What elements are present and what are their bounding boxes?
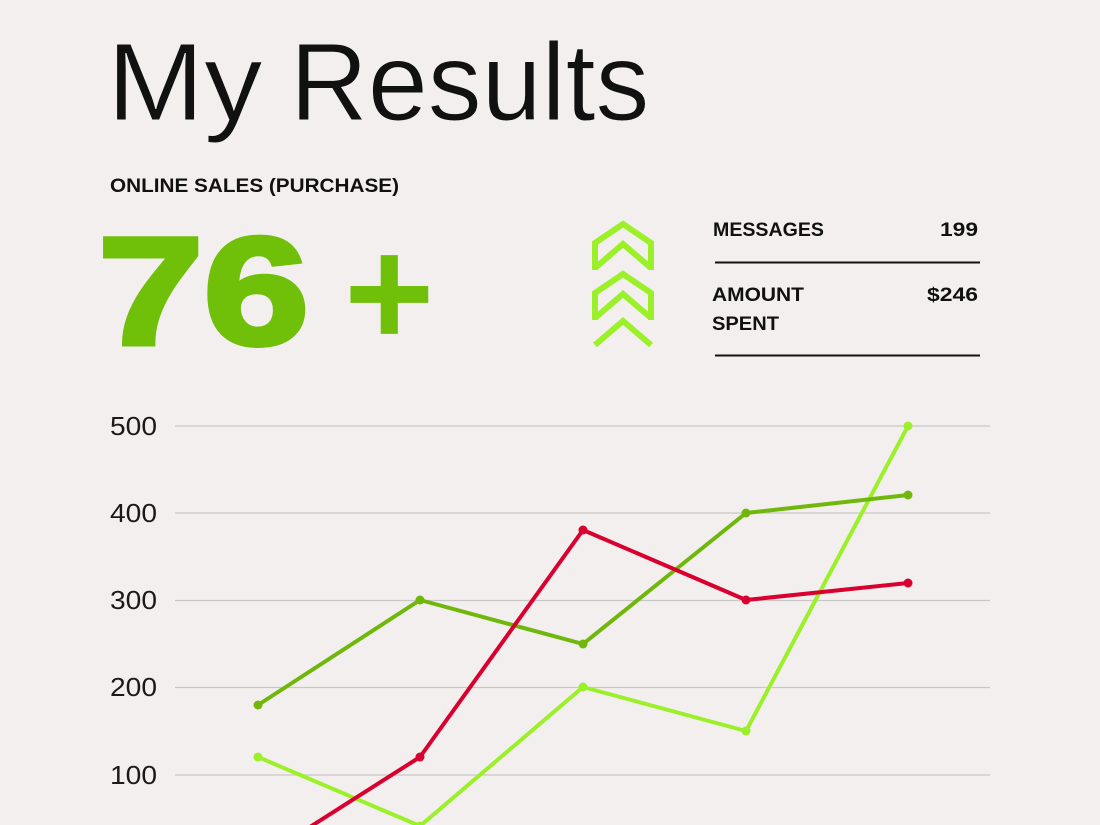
big number: 76: 76 [98, 206, 309, 377]
plus sign: + [344, 206, 435, 379]
y-axis labels: 400 [110, 498, 157, 528]
title: My [107, 21, 263, 144]
y-axis labels: 500 [110, 411, 157, 441]
title [107, 21, 649, 144]
line chart [110, 411, 990, 825]
stat: messages: MESSAGES [713, 219, 824, 241]
y-axis labels: 200 [110, 672, 157, 702]
stat: messages: 199 [940, 219, 978, 241]
stats table [712, 219, 980, 356]
stat: amount spent [712, 284, 978, 335]
y-axis labels: 100 [110, 760, 157, 790]
stat: messages [713, 219, 978, 241]
stat: amount spent: $246 [927, 284, 978, 306]
series: dark green [254, 490, 912, 710]
stat: amount spent: AMOUNT [712, 284, 804, 306]
series: red [258, 526, 912, 825]
heading: online sales: ONLINE SALES (PURCHASE) [110, 175, 399, 197]
icon: upward chevrons [595, 224, 651, 345]
y-axis labels [110, 411, 157, 790]
stat: amount spent: SPENT [712, 313, 779, 335]
y-axis labels: 300 [110, 585, 157, 615]
series: light green [254, 422, 912, 825]
title: Results [290, 21, 649, 144]
